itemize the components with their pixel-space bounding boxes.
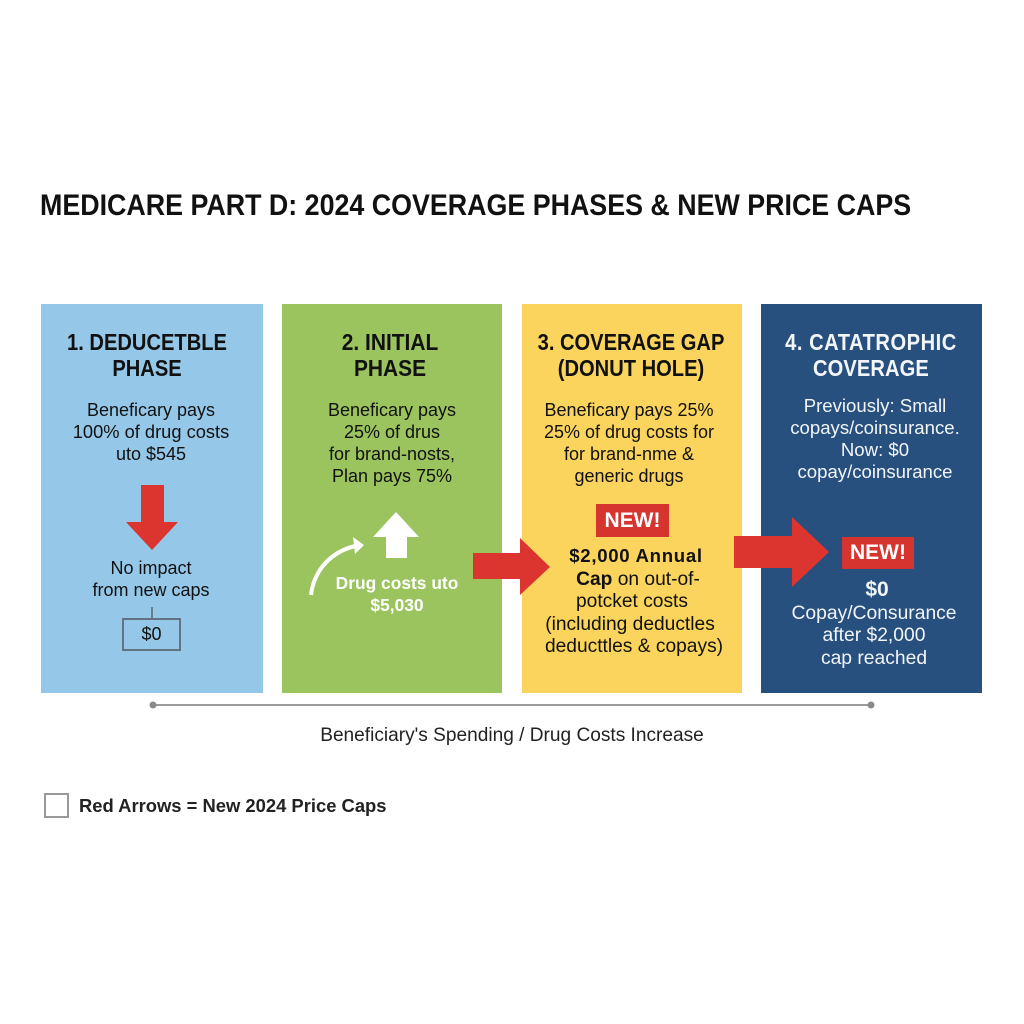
badge: new, phase 3 <box>596 504 669 537</box>
text: no impact: from new caps <box>92 580 210 600</box>
text: phase 4 cap <box>791 578 957 668</box>
text: drug costs: $5,030 <box>370 595 424 615</box>
text: phase 3 cap: Cap on out-of- <box>576 568 700 590</box>
heading: phase 4: 4. CATATROPHIC <box>785 329 957 355</box>
heading: phase 2: 2. INITIAL <box>342 329 438 355</box>
heading: phase 2 <box>342 329 438 381</box>
text: phase 4 cap: Copay/Consurance <box>791 602 957 624</box>
text: phase 1 description: Beneficary pays <box>87 400 215 420</box>
text: phase 2 description: Plan pays 75% <box>332 466 452 486</box>
text: phase 3 cap: deducttles & copays) <box>545 636 723 657</box>
text: phase 4 description: Previously: Small <box>804 395 946 416</box>
text: phase 3 cap: (including deductles <box>545 614 715 634</box>
panel: deductible phase <box>41 304 263 693</box>
heading: phase 4: COVERAGE <box>813 355 929 381</box>
text: phase 2 description <box>328 400 456 486</box>
text: phase 3 cap <box>545 545 723 657</box>
box: $0: $0 <box>141 624 162 644</box>
heading: phase 3: (DONUT HOLE) <box>558 355 704 381</box>
text: phase 2 description: Beneficary pays <box>328 400 456 420</box>
text: phase 3 description <box>544 400 714 486</box>
heading: phase 4 <box>785 329 957 381</box>
box: $0 <box>122 618 181 651</box>
heading: phase 3: 3. COVERAGE GAP <box>538 329 724 355</box>
heading: phase 1 <box>67 329 227 381</box>
panel: catastrophic coverage <box>761 304 982 693</box>
text: phase 4 cap: after $2,000 <box>823 625 925 646</box>
text: drug costs: Drug costs uto <box>336 573 458 593</box>
panel: coverage gap <box>522 304 742 693</box>
text: phase 3 description: 25% of drug costs for <box>544 422 714 442</box>
connector: text to box <box>151 607 153 618</box>
text: drug costs <box>336 573 458 615</box>
text: no impact <box>92 558 210 600</box>
text: no impact: No impact <box>110 558 192 578</box>
text: phase 2 description: 25% of drus <box>344 422 440 442</box>
text: phase 3 description: Beneficary pays 25% <box>544 400 714 420</box>
text: phase 4 description: Now: $0 <box>841 439 909 460</box>
text: phase 4 cap: cap reached <box>821 648 927 668</box>
panel: initial phase <box>282 304 502 693</box>
text: phase 4 cap: $0 <box>865 578 889 601</box>
heading: phase 1: 1. DEDUCETBLE <box>67 329 227 355</box>
text: phase 1 description: 100% of drug costs <box>73 421 229 442</box>
heading: phase 2: PHASE <box>354 355 426 381</box>
badge: new, phase 3: NEW! <box>604 509 660 532</box>
text: phase 3 cap: $2,000 Annual <box>569 545 703 566</box>
badge: new, phase 4 <box>842 537 914 569</box>
text: phase 1 description <box>73 400 229 464</box>
text: phase 4 description: copays/coinsurance. <box>790 417 960 438</box>
text: phase 3 description: generic drugs <box>574 466 684 486</box>
text: phase 4 description: copay/coinsurance <box>797 461 953 482</box>
text: phase 3 cap: potcket costs <box>576 591 688 612</box>
title: MEDICARE PART D: 2024 COVERAGE PHASES & NEW PRICE CAPS <box>40 189 911 222</box>
text: phase 3 description: for brand-nme & <box>564 444 694 464</box>
axis label: Beneficiary's Spending / Drug Costs Increase <box>320 725 704 746</box>
text: phase 1 description: uto $545 <box>116 444 186 464</box>
heading: phase 3 <box>538 329 724 381</box>
legend checkbox <box>44 793 69 818</box>
badge: new, phase 4: NEW! <box>850 541 906 564</box>
text: phase 4 description <box>790 395 960 482</box>
legend text: Red Arrows = New 2024 Price Caps <box>79 795 387 816</box>
heading: phase 1: PHASE <box>112 355 182 381</box>
legend <box>44 793 387 818</box>
text: phase 2 description: for brand-nosts, <box>329 444 455 464</box>
